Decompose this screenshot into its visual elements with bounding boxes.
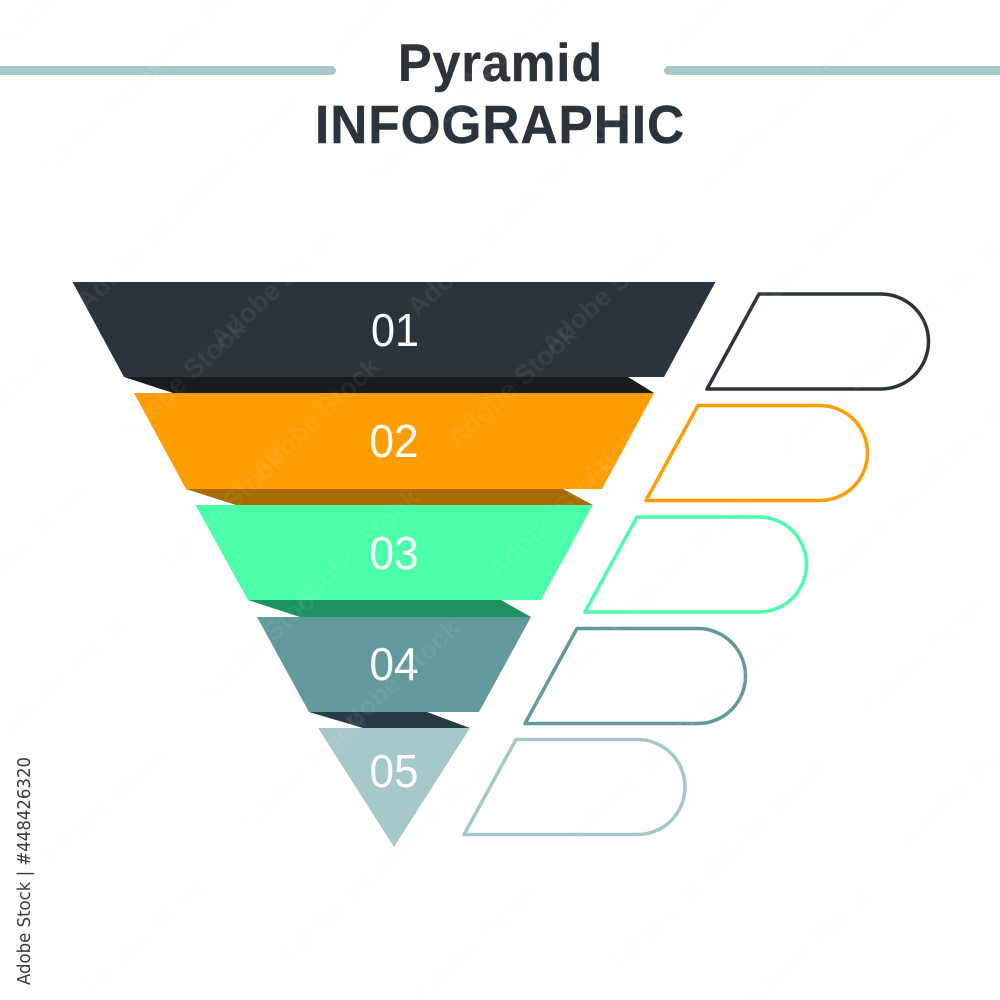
outline label 5 [464,740,685,834]
outline label 1 [707,294,928,389]
outline label 3 [585,517,806,612]
level 2 band [134,393,654,489]
stock watermark pattern: Adobe Stock [826,101,968,236]
stock watermark pattern: Adobe Stock [230,706,372,841]
stock watermark pattern: Adobe Stock [70,182,212,317]
title: Pyramid [398,34,603,93]
level 4 shadow [309,712,470,728]
stock watermark pattern: Adobe Stock [361,57,503,192]
level numbers: 03 [370,527,418,579]
stock watermark pattern: Adobe Stock [284,482,426,617]
right header rule [664,66,1000,75]
outline label 4 [525,628,746,724]
stock id caption: Adobe Stock | #448426320 [14,757,35,985]
stock watermark pattern: Adobe Stock [33,738,175,873]
stock watermark pattern: Adobe Stock [190,575,332,710]
stock watermark pattern: Adobe Stock [575,357,717,492]
level 1 shadow [124,377,654,393]
title [315,34,685,155]
stock watermark pattern: Adobe Stock [270,837,412,972]
stock watermark pattern: Adobe Stock [150,444,292,579]
stock watermark pattern: Adobe Stock [495,95,637,230]
stock watermark pattern: Adobe Stock [30,51,172,186]
level numbers [370,304,419,797]
stock watermark pattern: Adobe Stock [324,613,466,748]
level numbers: 04 [370,638,418,690]
stock watermark pattern: Adobe Stock [164,89,306,224]
stock watermark pattern: Adobe Stock [692,63,834,198]
stock watermark pattern: Adobe Stock [73,869,215,1000]
stock watermark pattern: Adobe Stock [244,351,386,486]
stock watermark pattern: Adobe Stock [535,226,677,361]
level 4 band [257,617,531,712]
level numbers: 01 [371,304,419,356]
stock watermark pattern: Adobe Stock [695,750,837,885]
stock watermark pattern: Adobe Stock [655,619,797,754]
stock watermark pattern: Adobe Stock [812,456,954,591]
stock watermark pattern: Adobe Stock [364,744,506,879]
stock watermark pattern: Adobe Stock [481,450,623,585]
stock watermark pattern: Adobe Stock [401,188,543,323]
stock watermark pattern: Adobe Stock [521,581,663,716]
left header rule [0,66,336,75]
stock watermark pattern: Adobe Stock [615,488,757,623]
stock watermark pattern: Adobe Stock [601,843,743,978]
level 3 band [196,505,593,600]
stock watermark pattern: Adobe Stock [561,712,703,847]
stock watermark pattern: Adobe Stock [732,194,874,329]
outline label 2 [646,406,868,500]
title: INFOGRAPHIC [315,95,685,155]
level 2 shadow [186,489,593,505]
stock watermark pattern: Adobe Stock [852,587,994,722]
level numbers: 02 [370,415,418,467]
stock watermark pattern: Adobe Stock [204,220,346,355]
level 5 triangle [318,728,470,847]
level numbers: 05 [370,745,418,797]
stock watermark pattern: Adobe Stock [110,313,252,448]
level 1 band [72,282,716,377]
pyramid funnel [72,282,716,847]
stock watermark pattern: Adobe Stock [441,319,583,454]
level 3 shadow [248,600,531,617]
stock watermark pattern: Adobe Stock [772,325,914,460]
